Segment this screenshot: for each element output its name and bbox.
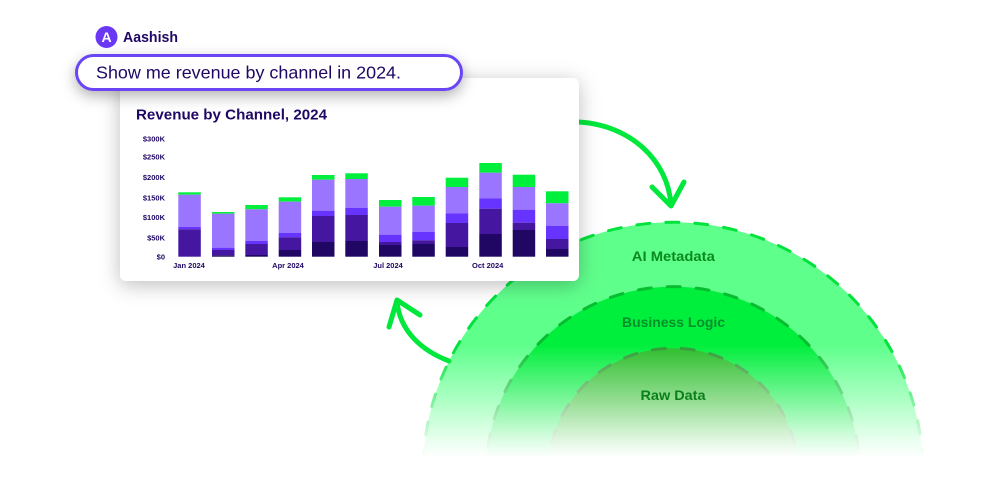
bar: Apr — [279, 197, 301, 257]
bar: Jul — [379, 200, 402, 257]
x axis labels: Oct 2024 — [472, 261, 504, 270]
bar: Feb — [212, 212, 234, 257]
y axis labels: $150K — [143, 194, 166, 202]
arrow: chart to layers — [579, 122, 684, 206]
y axis labels: $250K — [143, 152, 166, 162]
arrow: layers to chart — [389, 300, 449, 361]
user avatar and name — [96, 26, 178, 48]
x axis labels — [173, 261, 504, 270]
bar: Jan — [178, 192, 201, 257]
x axis labels: Apr 2024 — [272, 261, 305, 270]
bar: Jun — [345, 173, 368, 257]
label: Raw Data: Raw Data — [640, 387, 706, 403]
panel: chart card — [120, 78, 579, 281]
x axis labels: Jul 2024 — [373, 261, 404, 270]
y axis labels — [143, 134, 166, 262]
bar: May — [312, 175, 334, 257]
layer: Business Logic — [486, 287, 860, 460]
bottom white fade — [400, 345, 960, 467]
label: Business Logic: Business Logic — [622, 314, 725, 330]
x axis labels: Jan 2024 — [173, 261, 206, 270]
stacked bar chart — [178, 163, 569, 257]
user name: Aashish — [123, 30, 178, 46]
bar: Sep — [446, 178, 468, 257]
concentric data layers diagram — [400, 222, 960, 467]
y axis labels: $50K — [147, 234, 166, 242]
prompt input pill — [76, 56, 462, 90]
prompt text: Show me revenue by channel in 2024. — [96, 62, 401, 82]
y axis labels: $300K — [143, 134, 166, 144]
y axis labels: $0 — [157, 253, 165, 262]
bar: Dec — [546, 191, 568, 257]
bar: Oct — [479, 163, 502, 257]
y axis labels: $100K — [143, 213, 166, 222]
y axis labels: $200K — [143, 173, 166, 182]
label: AI Metadata: AI Metadata — [632, 248, 715, 264]
layer: Raw Data — [549, 348, 797, 460]
bar: Mar — [245, 205, 268, 257]
bar: Aug — [412, 197, 435, 257]
bar: Nov — [513, 175, 535, 257]
chart title: Revenue by Channel, 2024 — [136, 106, 328, 124]
layer: AI Metadata — [423, 222, 923, 460]
icon: avatar: A — [101, 29, 112, 45]
